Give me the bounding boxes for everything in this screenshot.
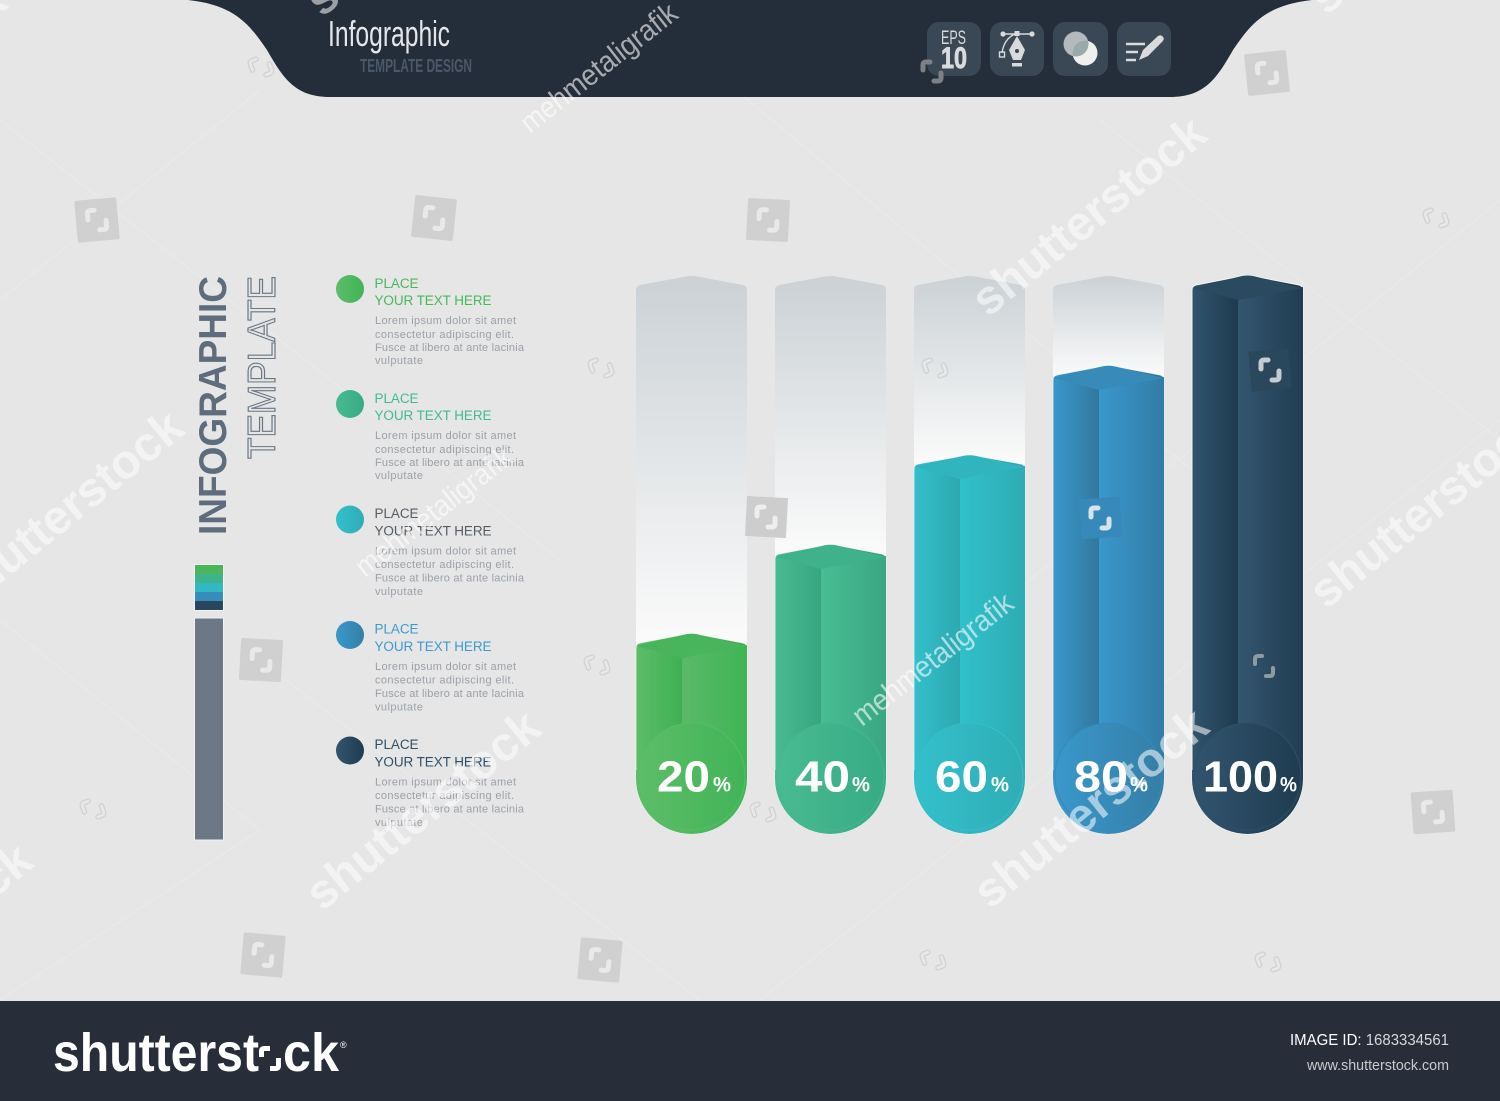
legend item 1: Fusce at libero at ante lacinia — [375, 342, 525, 354]
legend item 2: vulputate — [375, 470, 423, 482]
watermark: shutterstock text: shutterstock — [962, 106, 1217, 327]
legend item 3: consectetur adipiscing elit. — [375, 559, 514, 571]
watermark: mehmetaligrafik text: mehmetaligrafik — [846, 586, 1021, 733]
legend item 4: consectetur adipiscing elit. — [375, 674, 514, 686]
bar: 20% — [636, 276, 747, 834]
icon: EPS 10 badge: 10 — [941, 42, 967, 75]
bar: 100% — [1192, 276, 1303, 834]
icon: EPS 10 badge: EPS — [941, 28, 966, 49]
legend item 1: Lorem ipsum dolor sit amet — [375, 315, 516, 327]
legend item 3: YOUR TEXT HERE — [374, 524, 492, 538]
legend item 2: consectetur adipiscing elit. — [375, 444, 514, 456]
bar: 80%: 80 — [1074, 752, 1128, 802]
legend item 2: PLACE — [374, 391, 418, 406]
legend item 4: YOUR TEXT HERE — [374, 639, 492, 654]
header title: Infographic — [328, 13, 450, 54]
legend item 3 — [336, 506, 525, 598]
icon: EPS 10 badge — [927, 22, 981, 76]
grey vertical bar — [194, 618, 224, 840]
watermark: logo marks — [74, 50, 1455, 983]
legend item 4 — [336, 621, 525, 714]
bar: 80% — [1053, 276, 1164, 834]
legend item 1 — [336, 275, 525, 367]
colour swatch strip — [194, 564, 224, 611]
legend item 1: vulputate — [375, 355, 423, 367]
legend item 3: PLACE — [374, 506, 418, 521]
legend item 5: consectetur adipiscing elit. — [375, 790, 514, 802]
bar: 100%: % — [1280, 774, 1297, 796]
bar: 40%: % — [852, 774, 870, 796]
footer logo wordmark: ck — [283, 1023, 340, 1083]
legend item 3: vulputate — [375, 586, 423, 598]
watermark: shutterstock text: shutterstock — [964, 698, 1219, 919]
footer logo wordmark: o — [260, 1045, 278, 1078]
bar chart — [636, 276, 1303, 834]
bar: 40%: 40 — [795, 752, 850, 802]
legend item 3: Fusce at libero at ante lacinia — [375, 572, 525, 584]
bar: 100%: 100 — [1203, 752, 1278, 802]
legend item 4: vulputate — [375, 702, 423, 714]
watermark: mehmetaligrafik text: mehmetaligrafik — [349, 440, 520, 584]
icon: overlapping circles — [1053, 22, 1108, 76]
watermark: logos over dark shapes — [745, 62, 1292, 676]
legend item 5: Lorem ipsum dolor sit amet — [375, 776, 516, 788]
legend item 5: PLACE — [374, 737, 418, 752]
footer logo wordmark: shutterst — [53, 1023, 259, 1083]
legend item 2: Fusce at libero at ante lacinia — [375, 457, 525, 469]
footer bar — [0, 1001, 1500, 1101]
legend item 2 — [336, 390, 525, 482]
legend item 4: Fusce at libero at ante lacinia — [375, 688, 525, 700]
legend item 5: Fusce at libero at ante lacinia — [375, 804, 525, 816]
bar: 60% — [914, 276, 1025, 834]
legend item 5 — [336, 736, 525, 829]
legend item 5: vulputate — [375, 817, 423, 829]
bar: 60%: 60 — [935, 752, 988, 802]
legend item 5: YOUR TEXT HERE — [374, 754, 492, 770]
image id: IMAGE ID: 1683334561 — [1290, 1032, 1449, 1049]
legend item 1: YOUR TEXT HERE — [374, 293, 492, 308]
header subtitle: TEMPLATE DESIGN — [360, 56, 472, 76]
registered mark: ® — [340, 1040, 347, 1050]
watermark: shutterstock text: shutterstock — [296, 700, 551, 921]
legend item 2: Lorem ipsum dolor sit amet — [375, 430, 516, 442]
vertical title: TEMPLATE: TEMPLATE — [241, 276, 284, 459]
bar: 60%: % — [991, 774, 1009, 796]
legend item 3: Lorem ipsum dolor sit amet — [375, 546, 516, 558]
legend item 2: YOUR TEXT HERE — [374, 408, 492, 423]
legend item 4: PLACE — [374, 622, 418, 636]
header banner — [188, 0, 1312, 97]
bar: 20%: % — [713, 774, 731, 796]
vertical title: INFOGRAPHIC: INFOGRAPHIC — [192, 276, 235, 535]
website: www.shutterstock.com — [1306, 1058, 1449, 1074]
watermark: mehmetaligrafik text — [349, 0, 1021, 733]
legend item 1: PLACE — [374, 276, 418, 291]
bar: 20%: 20 — [657, 752, 710, 802]
legend item 1: consectetur adipiscing elit. — [375, 329, 514, 341]
legend item 4: Lorem ipsum dolor sit amet — [375, 661, 516, 673]
icon: pen tool — [990, 22, 1044, 76]
icon: pencil and lines — [1117, 22, 1171, 76]
bar: 80%: % — [1130, 774, 1148, 796]
bar: 40% — [775, 276, 886, 834]
